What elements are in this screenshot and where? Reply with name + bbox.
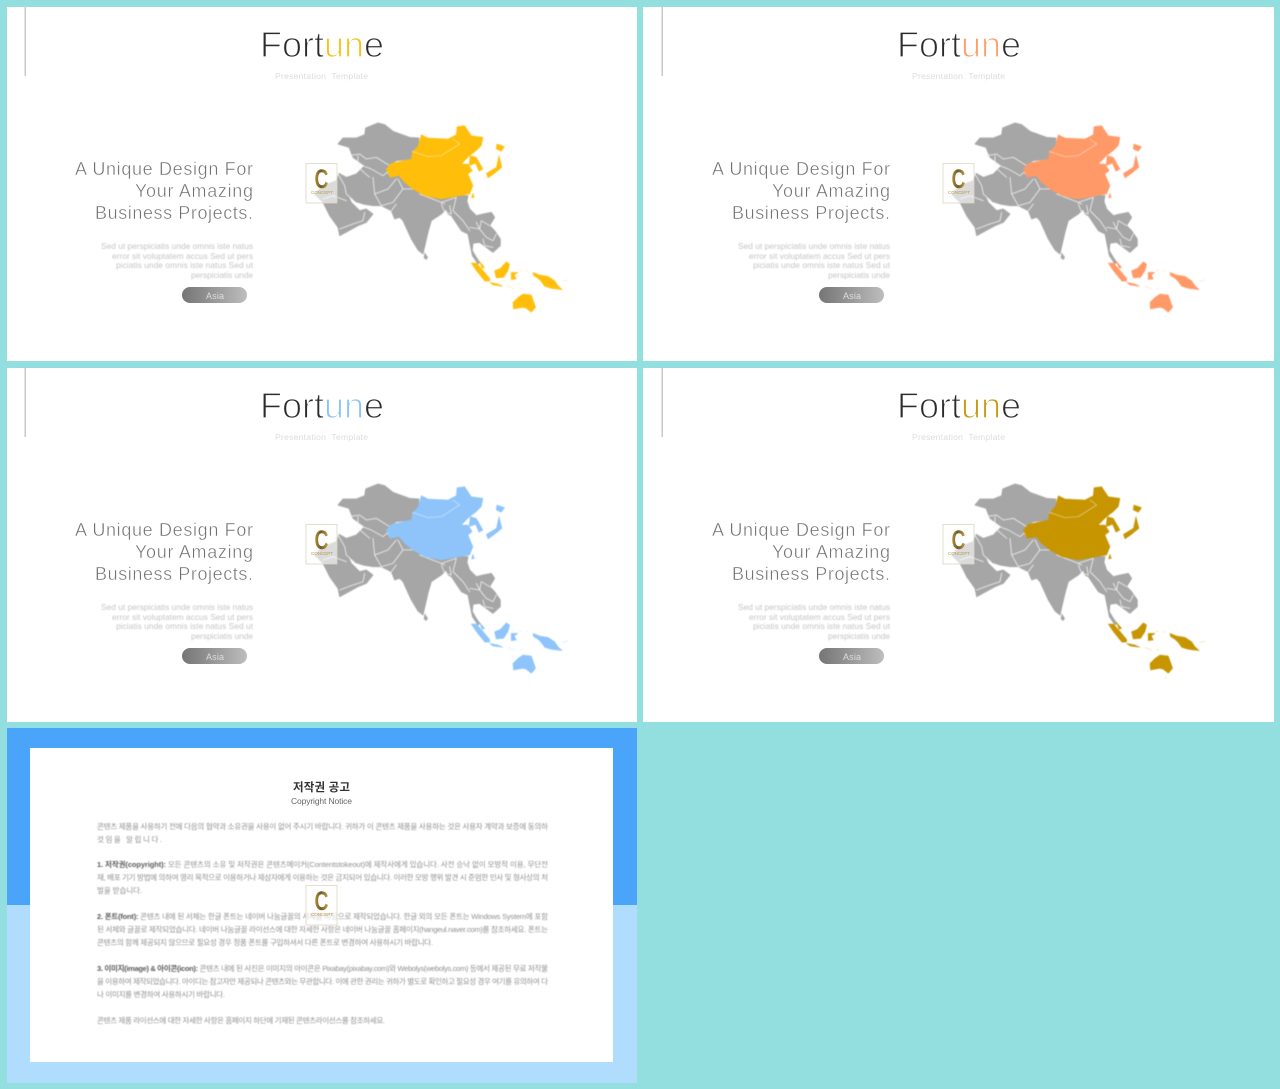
heading	[712, 159, 890, 223]
button: Asia: Asia	[843, 652, 861, 662]
body text: error sit voluptatem accus Sed ut pers	[749, 612, 890, 622]
intro paragraph: 것임을 알립니다.	[97, 834, 162, 844]
body text: piciatis unde omnis iste natus Sed ut	[753, 621, 891, 631]
heading: Your Amazing	[772, 542, 890, 562]
panel: slide blue	[7, 368, 637, 722]
heading: Your Amazing	[135, 542, 253, 562]
heading: Business Projects.	[95, 564, 253, 584]
section: image and icon: 나 이미지를 변경하여 사용하시기 바랍니다.	[97, 989, 225, 999]
section: copyright: 벌을 받습니다.	[97, 885, 142, 895]
heading	[75, 520, 253, 584]
section: font: 된 서체와 글꼴로 제작되었습니다. 네이버 나눔글꼴 라이선스에 대한 자세한 사항은 네이버 나눔글꼴 홈페이지(hangeul.naver.com)를 참조하세요. 폰트는	[97, 924, 548, 934]
panel: slide yellow	[7, 7, 637, 361]
map of Asia, orange highlight	[952, 123, 1205, 317]
heading: Business Projects.	[95, 203, 253, 223]
body text: perspiciatis unde	[191, 270, 253, 280]
button: Asia	[182, 648, 247, 664]
body text: error sit voluptatem accus Sed ut pers	[112, 251, 253, 261]
section: font: 콘텐츠의 함께 제공되지 않으므로 필요성 경우 정품 폰트를 구입하셔서 다른 폰트로 변경하여 사용하시기 바랍니다.	[97, 937, 433, 947]
section: image and icon	[97, 963, 548, 999]
logo watermark: C	[952, 164, 966, 194]
heading: Your Amazing	[135, 181, 253, 201]
body text	[738, 241, 891, 280]
intro paragraph: 콘텐츠 제품을 사용하기 전에 다음의 협약과 소유권을 사용이 없어 주시기 바랍니다. 귀하가 이 콘텐츠 제품을 사용하는 것은 사용자 계약과 보증에 동의하	[97, 821, 548, 831]
closing line: 콘텐츠 제품 라이선스에 대한 자세한 사항은 홈페이지 하단에 기재된 콘텐츠라이선스를 참조하세요.	[97, 1015, 385, 1025]
logo watermark: C	[952, 525, 966, 555]
title: Fortune	[897, 24, 1021, 65]
body text: perspiciatis unde	[191, 631, 253, 641]
logo watermark: C	[314, 886, 328, 916]
body text: piciatis unde omnis iste natus Sed ut	[753, 260, 891, 270]
title: Fortune	[260, 24, 384, 65]
heading: A Unique Design For	[712, 520, 890, 540]
map of Asia, dark gold highlight	[952, 484, 1205, 678]
section: copyright	[97, 859, 548, 895]
subtitle: Presentation Template	[275, 432, 368, 442]
body text: error sit voluptatem accus Sed ut pers	[749, 251, 890, 261]
body text: perspiciatis unde	[828, 270, 890, 280]
button: Asia: Asia	[206, 291, 224, 301]
button: Asia	[819, 287, 884, 303]
logo watermark	[943, 164, 974, 203]
heading: Your Amazing	[772, 181, 890, 201]
panel: slide orange	[643, 7, 1274, 361]
intro paragraph	[97, 821, 548, 844]
body text: Sed ut perspiciatis unde omnis iste natus	[101, 241, 253, 251]
panel: copyright notice	[7, 728, 637, 1083]
heading	[75, 159, 253, 223]
title: Fortune	[260, 385, 384, 426]
logo watermark: CONCEPT	[311, 551, 333, 556]
logo watermark	[943, 524, 974, 564]
section: font	[97, 911, 548, 947]
section: font: 2. 폰트(font): 콘텐츠 내에 된 서체는 한글 폰트는 네이버 나눔글꼴의 서체를 바탕으로 제작되었습니다. 한글 외의 모든 폰트는 Windows System에 포함	[97, 911, 548, 921]
heading: A Unique Design For	[75, 520, 253, 540]
body text	[738, 602, 891, 641]
body text: Sed ut perspiciatis unde omnis iste natus	[738, 241, 890, 251]
panel: slide dark gold	[643, 368, 1274, 722]
heading: A Unique Design For	[75, 159, 253, 179]
logo watermark	[306, 524, 337, 564]
subtitle: Presentation Template	[275, 71, 368, 81]
body text: piciatis unde omnis iste natus Sed ut	[116, 260, 254, 270]
logo watermark: C	[314, 164, 328, 194]
map of Asia, yellow highlight	[315, 123, 568, 317]
body text: piciatis unde omnis iste natus Sed ut	[116, 621, 254, 631]
section: image and icon: 을 이용하여 제작되었습니다. 아이디는 참고자만 제공되나 콘텐츠와는 무관합니다. 이에 관한 권리는 귀하가 별도로 확인하고 필요성 경우 여기를 유의하여 다	[97, 976, 548, 986]
body text: perspiciatis unde	[828, 631, 890, 641]
body text: error sit voluptatem accus Sed ut pers	[112, 612, 253, 622]
body text: Sed ut perspiciatis unde omnis iste natus	[738, 602, 890, 612]
button: Asia	[182, 287, 247, 303]
heading	[712, 520, 890, 584]
heading: A Unique Design For	[712, 159, 890, 179]
heading: Business Projects.	[732, 203, 890, 223]
logo watermark: CONCEPT	[311, 912, 333, 917]
button: Asia	[819, 648, 884, 664]
notice subtitle: Copyright Notice	[291, 796, 352, 806]
logo watermark: C	[314, 525, 328, 555]
notice title: 저작권 공고	[293, 780, 350, 794]
body text	[101, 602, 254, 641]
subtitle: Presentation Template	[912, 432, 1005, 442]
body text: Sed ut perspiciatis unde omnis iste natus	[101, 602, 253, 612]
section: copyright: 1. 저작권(copyright): 모든 콘텐츠의 소유 및 저작권은 콘텐츠메이커(Contentstokeout)에 제작사에게 있습니다. 사전 승낙 없이 모방적 이용, 무단전	[97, 859, 548, 869]
body text	[101, 241, 254, 280]
title: Fortune	[897, 385, 1021, 426]
logo watermark: CONCEPT	[948, 190, 970, 195]
subtitle: Presentation Template	[912, 71, 1005, 81]
logo watermark: CONCEPT	[311, 190, 333, 195]
section: image and icon: 3. 이미지(image) & 아이콘(icon): 콘텐츠 내에 된 사진은 이미지의 아이콘은 Pixabay(pixabay.com)와 Webolys(webolys.com) 등에서 제공된 무료 저작물	[97, 963, 548, 973]
logo watermark	[306, 886, 337, 925]
heading: Business Projects.	[732, 564, 890, 584]
section: copyright: 재, 배포 기기 방법에 의하여 영리 목적으로 이용하거나 제삼자에게 이용하는 것은 금지되어 있습니다. 이러한 모방 행위 발견 시 준엄한 민사 및 형사상의 처	[97, 872, 548, 882]
map of Asia, blue highlight	[315, 484, 568, 678]
button: Asia: Asia	[843, 291, 861, 301]
logo watermark: CONCEPT	[948, 551, 970, 556]
button: Asia: Asia	[206, 652, 224, 662]
logo watermark	[306, 164, 337, 203]
